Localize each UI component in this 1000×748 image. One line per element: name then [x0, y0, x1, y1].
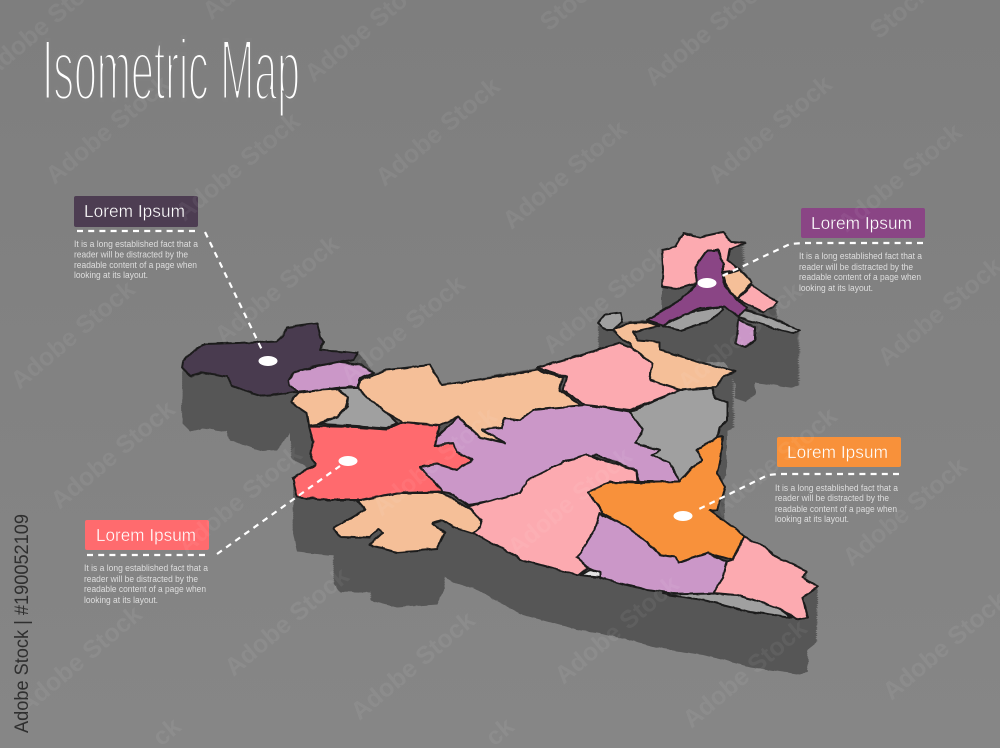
callout: dark region: looking at its layout.: [74, 270, 148, 280]
watermarks: Adobe Stock: [707, 402, 842, 522]
callout: purple region: reader will be distracted by the: [799, 262, 913, 272]
callout: purple region: It is a long established fact that a: [799, 251, 922, 261]
watermarks: Adobe Stock: [5, 275, 140, 395]
watermarks: Adobe Stock: [345, 606, 480, 726]
region: gray south strip: [663, 593, 792, 618]
region: pond: [394, 414, 405, 420]
marker: orange region: [674, 511, 692, 521]
region: dark north-west: [182, 323, 358, 396]
callout: orange region: reader will be distracted by the: [775, 493, 889, 503]
watermarks: Adobe Stock: [537, 240, 672, 360]
map extrusion shadow: [182, 232, 818, 674]
region: pink south-east: [713, 537, 818, 619]
callout: red region: looking at its layout.: [84, 595, 158, 605]
region: pink central: [468, 455, 638, 575]
callout: orange region: Lorem Ipsum: [787, 442, 888, 462]
callout: red region: readable content of a page when: [84, 584, 206, 594]
callout: dark region: Lorem Ipsum: [84, 201, 185, 221]
text: Isometric Map: [42, 22, 300, 118]
watermarks: Adobe Stock: [549, 570, 684, 690]
region: peach north: [358, 365, 585, 443]
watermarks: Adobe Stock: [170, 107, 305, 227]
callout: purple region: looking at its layout.: [799, 283, 873, 293]
isometric map regions: [182, 232, 818, 619]
watermarks: Adobe Stock: [677, 614, 812, 734]
region: gray long right: [738, 310, 800, 333]
callout: orange region: readable content of a page when: [775, 504, 897, 514]
region: peach north-east: [613, 322, 735, 390]
marker: purple region: [698, 278, 716, 288]
watermarks: Adobe Stock: [45, 395, 180, 515]
watermarks: Adobe Stock: [370, 72, 505, 192]
region: small peach west: [291, 389, 348, 425]
region: violet small north-east: [735, 320, 755, 347]
marker: red region: [338, 456, 358, 466]
region: gray west: [320, 388, 397, 428]
region: purple north-east: [647, 250, 747, 325]
region: pink small north-east: [738, 285, 777, 312]
region: violet north-west: [289, 362, 374, 392]
region: red west: [293, 422, 472, 500]
watermarks: Adobe Stock: [367, 402, 502, 522]
watermarks: Adobe Stock: [335, 270, 470, 390]
callout: red region: Lorem Ipsum: [96, 525, 196, 545]
watermarks: Adobe Stock: [502, 442, 637, 562]
region: peach small north-east: [723, 270, 752, 298]
callout: orange region: [695, 437, 901, 524]
region: gray east: [630, 388, 727, 482]
callout: dark region: It is a long established fact that a: [74, 239, 198, 249]
region: gray long centre: [663, 306, 723, 330]
region: violet south: [577, 513, 727, 595]
watermarks: Adobe Stock: [497, 115, 632, 235]
callout: orange region: looking at its layout.: [775, 514, 849, 524]
callout: red region: reader will be distracted by the: [84, 574, 198, 584]
watermarks: Adobe Stock: [832, 118, 967, 238]
callout: dark region: readable content of a page when: [74, 260, 197, 270]
watermarks: Adobe Stock: [12, 600, 147, 720]
watermarks: Adobe Stock: [209, 230, 344, 350]
watermarks: Adobe Stock: [702, 70, 837, 190]
callout: purple region: readable content of a page when: [799, 272, 921, 282]
region: orange east: [588, 436, 745, 563]
watermarks: Adobe Stock: [219, 562, 354, 682]
callout: red region: It is a long established fact that a: [84, 563, 208, 573]
callout: dark region: [74, 196, 262, 350]
watermarks: Adobe Stock: [837, 452, 972, 572]
callout: dark region: reader will be distracted by the: [74, 250, 188, 260]
stock id label: Adobe Stock | #190052109: [12, 514, 33, 733]
watermarks: Adobe Stock: [172, 440, 307, 560]
watermarks: Adobe Stock: [40, 70, 175, 190]
watermarks: Adobe Stock: [672, 277, 807, 397]
region: pink north-mid: [537, 343, 680, 410]
region: violet central: [420, 405, 680, 505]
marker: dark region: [258, 356, 278, 366]
region: pink far north: [662, 232, 745, 289]
callout: purple region: [720, 208, 925, 293]
callout: orange region: It is a long established fact that a: [775, 483, 898, 493]
callout: red region: [84, 466, 340, 605]
callout: purple region: Lorem Ipsum: [811, 213, 912, 233]
region: peach south-west: [333, 493, 483, 552]
region: white islet: [580, 569, 600, 577]
region: gray small north-east: [598, 313, 622, 330]
